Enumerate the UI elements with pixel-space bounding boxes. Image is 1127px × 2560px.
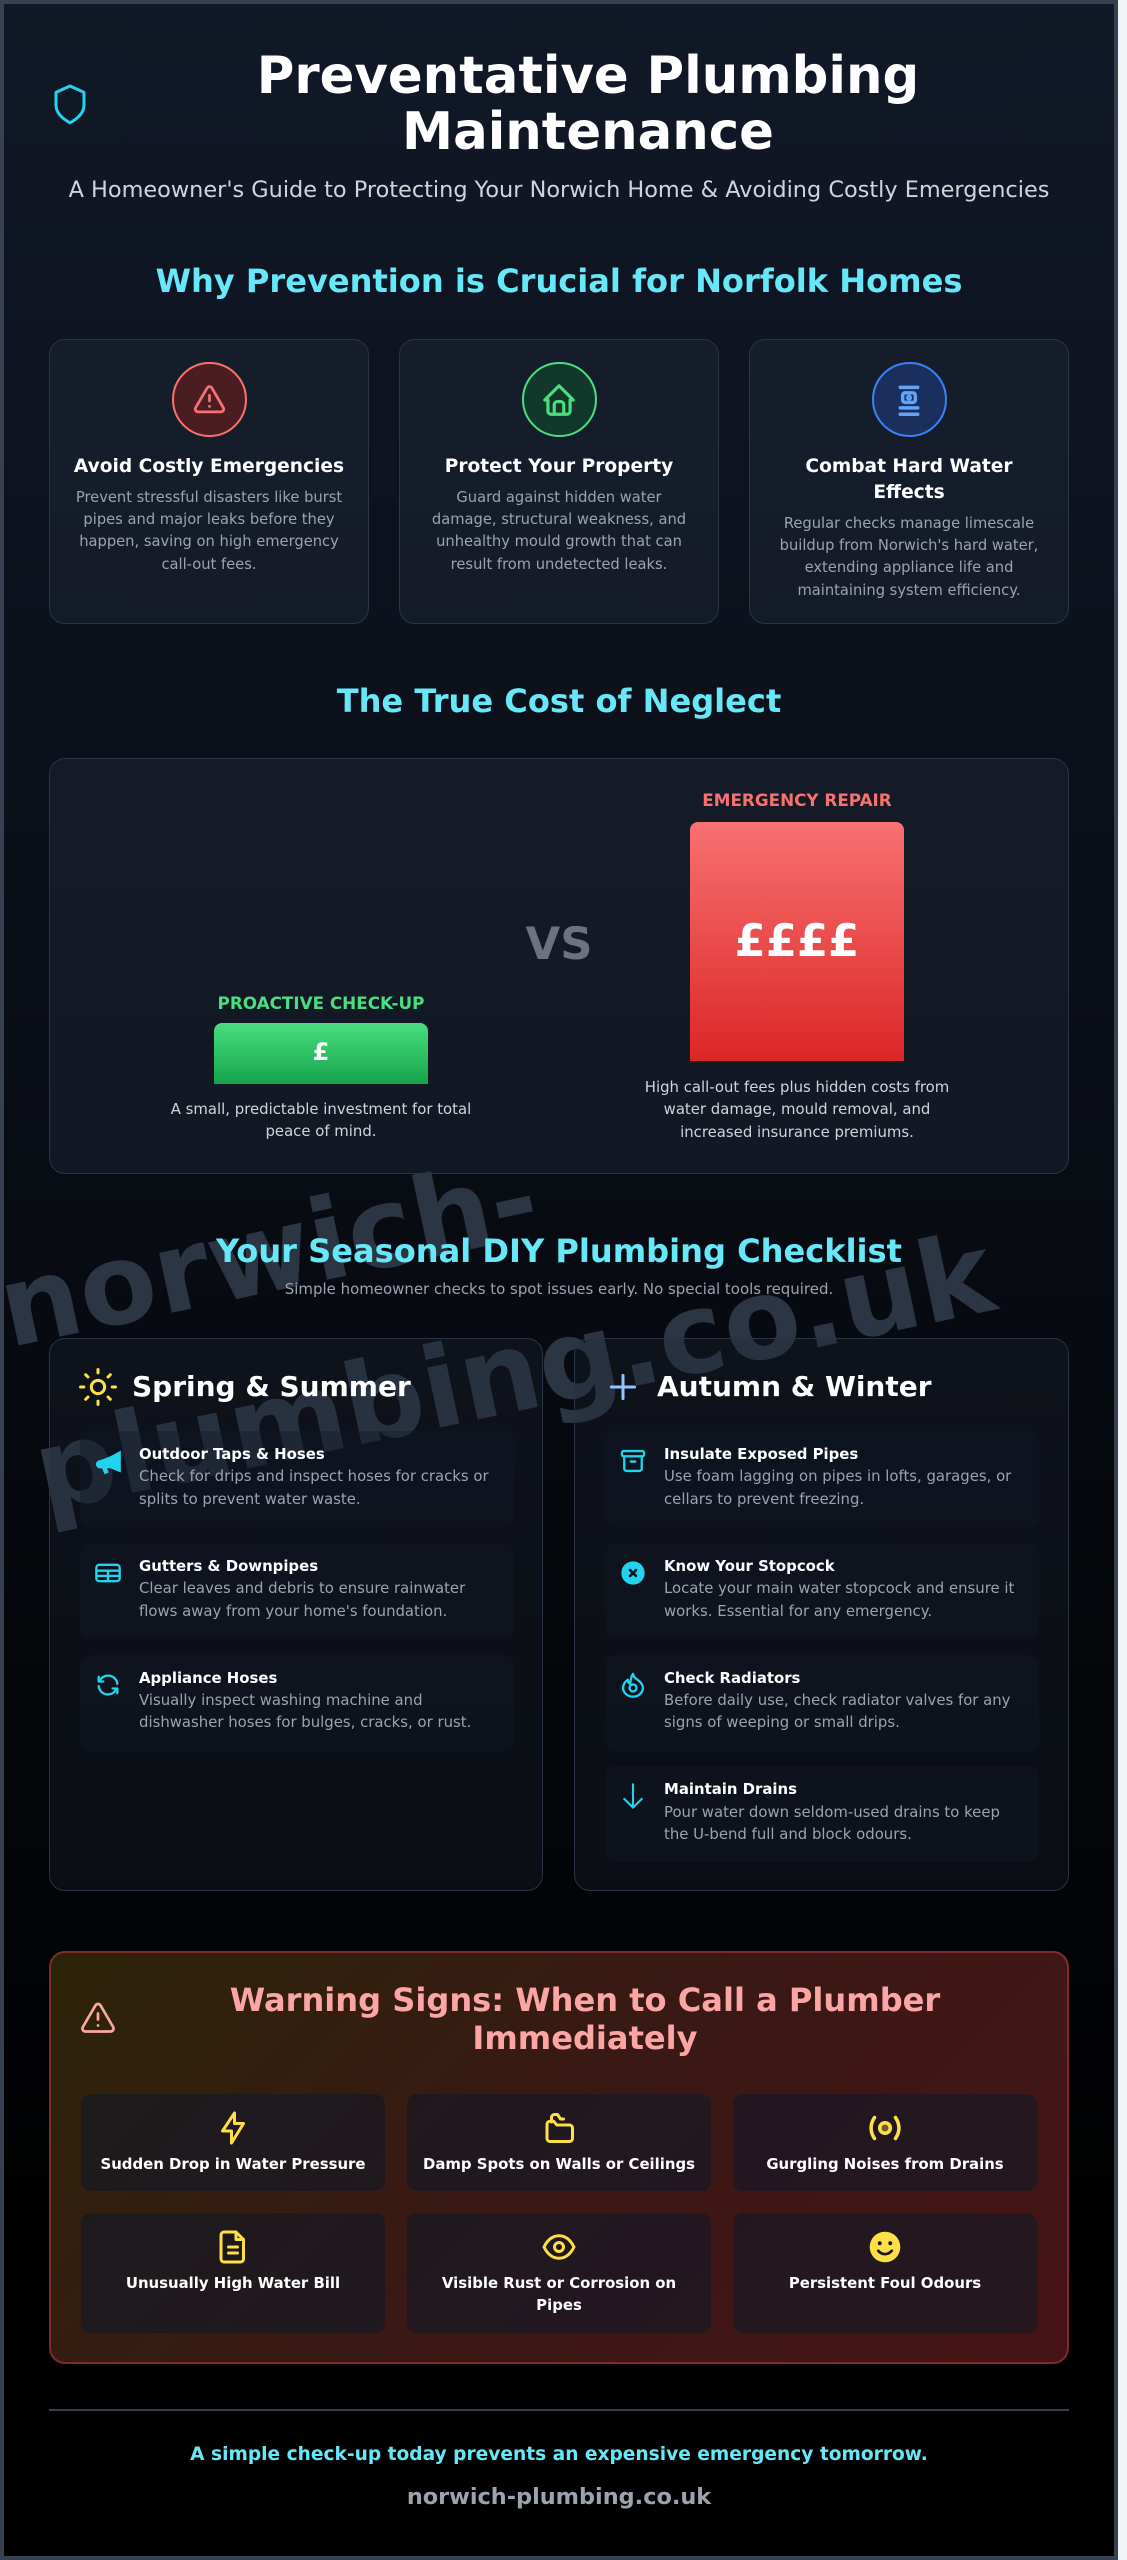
proactive text: peace of mind.	[265, 1122, 377, 1140]
item text: Clear leaves and debris to ensure rainwater	[139, 1579, 465, 1597]
card text: call-out fees.	[161, 556, 257, 573]
subtitle: A Homeowner's Guide to Protecting Your Norwich Home & Avoiding Costly Emergencies	[69, 177, 1049, 203]
proactive text: A small, predictable investment for total	[171, 1100, 471, 1118]
panel: combat hard water	[749, 339, 1069, 624]
card text	[76, 488, 342, 573]
title: Preventative Plumbing	[257, 46, 919, 106]
bar: emergency: ££££	[735, 914, 859, 967]
card title: Avoid Costly Emergencies	[74, 456, 344, 476]
item text: Check for drips and inspect hoses for cracks or	[139, 1467, 489, 1485]
item title: Gutters & Downpipes	[139, 1557, 318, 1575]
item text: Locate your main water stopcock and ensure it	[664, 1579, 1014, 1597]
icon: house	[522, 362, 596, 437]
card text: pipes and major leaks before they	[83, 511, 335, 528]
item text: Use foam lagging on pipes in lofts, garages, or	[664, 1467, 1011, 1485]
icon: lightning	[221, 2111, 245, 2145]
sign label: Damp Spots on Walls or Ceilings	[423, 2155, 695, 2173]
bar: proactive	[214, 1023, 428, 1084]
icon: warning triangle	[81, 2002, 115, 2033]
item title: Check Radiators	[664, 1669, 800, 1687]
icon: megaphone	[96, 1450, 121, 1474]
card text	[432, 488, 686, 573]
item text: signs of weeping or small drips.	[664, 1713, 900, 1731]
card text: extending appliance life and	[805, 559, 1013, 576]
watermark: plumbing.co.uk	[22, 1208, 1004, 1538]
sign: gurgling	[733, 2094, 1037, 2191]
heading: true cost: The True Cost of Neglect	[337, 682, 781, 720]
emergency label: EMERGENCY REPAIR	[702, 790, 892, 810]
panel: warning signs	[49, 1951, 1069, 2364]
card text: happen, saving on high emergency	[79, 533, 339, 550]
checklist item: outdoor taps	[80, 1431, 514, 1527]
sign: rust	[407, 2213, 711, 2333]
item title: Insulate Exposed Pipes	[664, 1445, 858, 1463]
card title: Combat Hard Water	[805, 456, 1013, 476]
icon: document	[220, 2230, 245, 2264]
sign label	[442, 2274, 676, 2314]
vs: VS	[526, 917, 592, 970]
icon: warning triangle	[172, 362, 246, 437]
icon: frost plus	[610, 1374, 636, 1400]
panel: autumn and winter	[574, 1338, 1069, 1891]
item title: Know Your Stopcock	[664, 1557, 835, 1575]
item text: Before daily use, check radiator valves for any	[664, 1691, 1010, 1709]
warning heading	[230, 1981, 940, 2056]
bar: emergency	[690, 822, 904, 1061]
icon: eye	[542, 2234, 576, 2260]
emergency text: High call-out fees plus hidden costs from	[645, 1078, 949, 1096]
panel: cost comparison	[49, 758, 1069, 1174]
season title: Spring & Summer	[132, 1370, 411, 1403]
checklist intro: Simple homeowner checks to spot issues early. No special tools required.	[285, 1280, 833, 1298]
item text	[139, 1467, 489, 1508]
item text: cellars to prevent freezing.	[664, 1490, 864, 1508]
card title	[805, 456, 1013, 502]
icon: gutter	[95, 1564, 121, 1582]
sign label: Pipes	[536, 2296, 582, 2314]
item text: works. Essential for any emergency.	[664, 1602, 932, 1620]
footer tagline: A simple check-up today prevents an expensive emergency tomorrow.	[190, 2444, 928, 2465]
icon: smiley	[870, 2232, 900, 2262]
item title: Appliance Hoses	[139, 1669, 277, 1687]
warning heading: Immediately	[472, 2018, 698, 2056]
item title: Outdoor Taps & Hoses	[139, 1445, 325, 1463]
card text: unhealthy mould growth that can	[436, 533, 682, 550]
card text: maintaining system efficiency.	[797, 582, 1021, 599]
item text	[139, 1579, 466, 1620]
card title: Effects	[873, 482, 945, 502]
item text: flows away from your home's foundation.	[139, 1602, 447, 1620]
emergency text: water damage, mould removal, and	[664, 1100, 930, 1118]
panel: avoid costly emergencies	[49, 339, 369, 624]
sign label: Sudden Drop in Water Pressure	[100, 2155, 366, 2173]
item text: the U-bend full and block odours.	[664, 1825, 912, 1843]
icon: flame	[622, 1672, 644, 1698]
item text	[664, 1803, 1000, 1843]
proactive text	[170, 1100, 471, 1140]
proactive label: PROACTIVE CHECK-UP	[218, 993, 424, 1013]
item text	[664, 1467, 1012, 1508]
panel: spring and summer	[49, 1338, 543, 1891]
icon: sun	[79, 1368, 117, 1406]
sign: pressure drop	[81, 2094, 385, 2191]
sign label: Persistent Foul Odours	[789, 2274, 981, 2292]
item text: Pour water down seldom-used drains to keep	[664, 1803, 1000, 1821]
item text	[664, 1691, 1010, 1731]
sign: odours	[733, 2213, 1037, 2333]
card text: buildup from Norwich's hard water,	[780, 537, 1038, 554]
icon: water softener	[872, 362, 946, 437]
item text: Visually inspect washing machine and	[139, 1691, 423, 1709]
card text: damage, structural weakness, and	[432, 511, 686, 528]
item title: Maintain Drains	[664, 1780, 797, 1798]
sign label: Gurgling Noises from Drains	[766, 2155, 1004, 2173]
card text: Regular checks manage limescale	[784, 514, 1034, 532]
item text: dishwasher hoses for bulges, cracks, or rust.	[139, 1713, 471, 1731]
item text: splits to prevent water waste.	[139, 1490, 361, 1508]
title	[257, 46, 919, 162]
emergency text: increased insurance premiums.	[680, 1123, 914, 1141]
item text	[664, 1579, 1014, 1620]
icon: stop circle	[621, 1561, 645, 1585]
watermark: norwich-	[0, 1133, 549, 1374]
checklist item: insulate	[605, 1431, 1039, 1527]
checklist item: gutters	[80, 1543, 514, 1639]
icon: broadcast	[869, 2116, 901, 2140]
header	[54, 46, 1049, 203]
sign label: Visible Rust or Corrosion on	[442, 2274, 676, 2292]
icon: archive box	[620, 1450, 646, 1472]
card text: result from undetected leaks.	[451, 556, 667, 573]
checklist item: drains	[605, 1766, 1039, 1862]
title: Maintenance	[402, 102, 774, 162]
icon: folders	[546, 2113, 574, 2143]
season title: Autumn & Winter	[657, 1370, 932, 1403]
heading: seasonal checklist: Your Seasonal DIY Plumbing Checklist	[216, 1232, 902, 1270]
sign: damp spots	[407, 2094, 711, 2191]
checklist item: stopcock	[605, 1543, 1039, 1639]
checklist item: radiators	[605, 1655, 1039, 1751]
heading: why prevention: Why Prevention is Crucial for Norfolk Homes	[156, 262, 962, 300]
icon: down arrow	[623, 1783, 643, 1809]
icon: shield	[54, 84, 86, 124]
sign label: Unusually High Water Bill	[126, 2274, 340, 2292]
footer website: norwich-plumbing.co.uk	[407, 2484, 711, 2510]
footer	[49, 2409, 1069, 2519]
emergency text	[645, 1078, 949, 1141]
icon: refresh	[98, 1674, 118, 1696]
panel: protect your property	[399, 339, 719, 624]
item text	[139, 1691, 471, 1731]
card title: Protect Your Property	[445, 456, 673, 476]
card text: Prevent stressful disasters like burst	[76, 488, 342, 506]
warning heading: Warning Signs: When to Call a Plumber	[230, 1981, 940, 2019]
card text	[780, 514, 1038, 599]
bar: proactive: £	[313, 1038, 329, 1066]
card text: Guard against hidden water	[456, 488, 662, 506]
checklist item: appliance hoses	[80, 1655, 514, 1751]
sign: water bill	[81, 2213, 385, 2333]
